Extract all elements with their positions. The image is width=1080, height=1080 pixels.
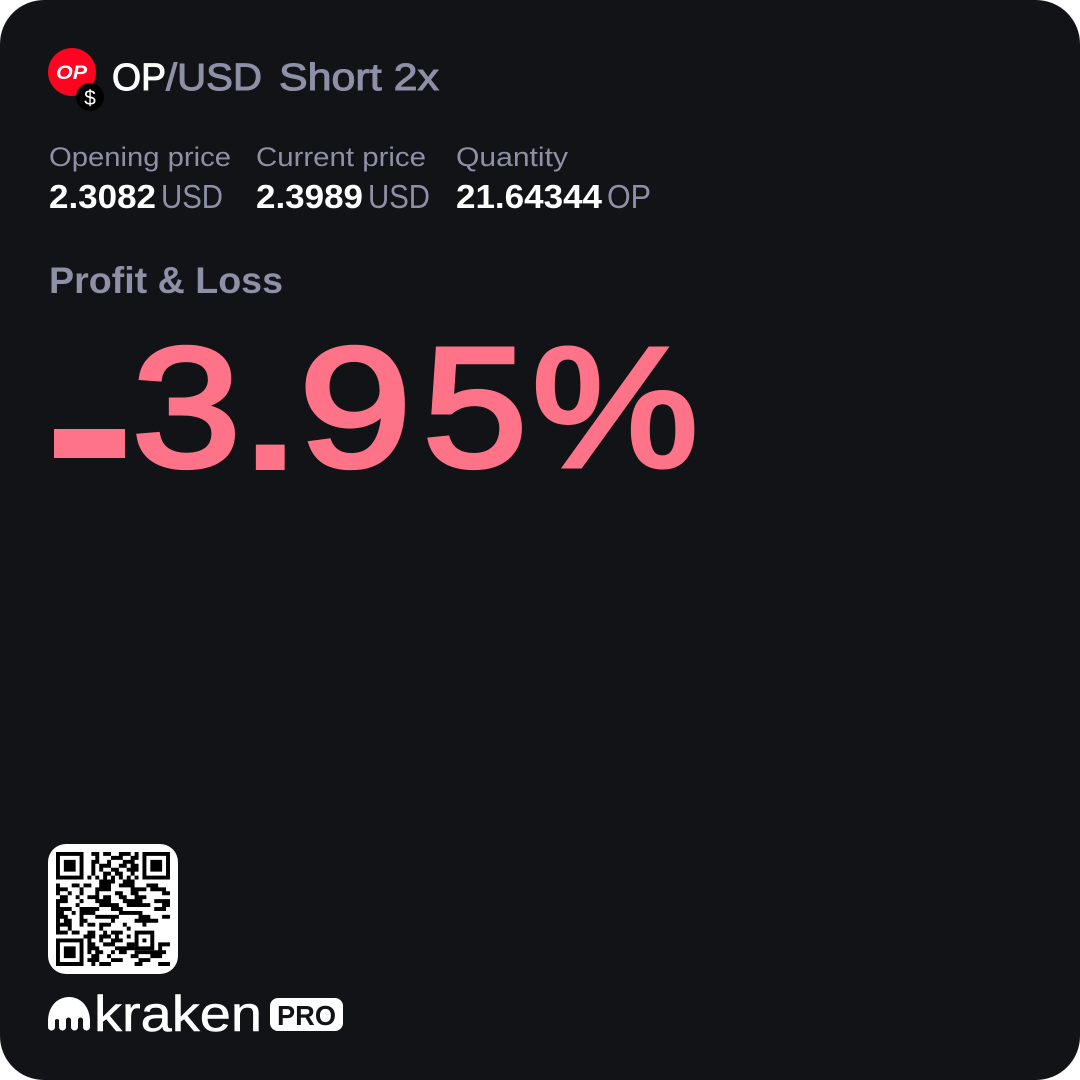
stat: current price: 2.3989	[256, 178, 363, 215]
big value: PnL percent: .	[242, 316, 299, 506]
big value: PnL percent: %	[532, 312, 698, 502]
icon: OP coin with USD badge: OP	[56, 63, 87, 84]
big value: PnL percent	[54, 312, 698, 506]
stat: quantity: 21.64344	[456, 178, 603, 215]
stat: quantity: Quantity	[456, 142, 569, 172]
QR code	[48, 844, 178, 974]
big value: PnL percent: 3	[132, 312, 241, 502]
stat: current price	[256, 142, 430, 215]
badge: PRO	[270, 998, 343, 1031]
title: pair and position: OP	[112, 57, 166, 99]
icon: kraken mark	[48, 997, 90, 1030]
title: pair and position	[112, 57, 439, 99]
icon: OP coin with USD badge: $	[84, 87, 96, 110]
stat: quantity	[456, 142, 651, 215]
heading: profit and loss: Profit & Loss	[49, 260, 283, 301]
big value: PnL percent: 5	[423, 312, 527, 502]
title: pair and position: /USD	[166, 57, 262, 99]
stat: opening price	[49, 142, 231, 215]
stat: opening price: 2.3082	[49, 178, 156, 215]
stat: opening price: USD	[161, 178, 223, 215]
stat: current price: USD	[368, 178, 430, 215]
stat: opening price: Opening price	[49, 142, 231, 172]
logo: Kraken Pro: PRO	[277, 1000, 336, 1031]
stat: current price: Current price	[256, 142, 426, 172]
icon: OP coin with USD badge	[48, 48, 104, 111]
wordmark: kraken	[94, 986, 262, 1042]
title: pair and position: Short 2x	[279, 57, 439, 99]
stat: quantity: OP	[607, 178, 651, 215]
big value: PnL percent: 9	[299, 312, 411, 502]
logo: Kraken Pro	[48, 986, 343, 1042]
